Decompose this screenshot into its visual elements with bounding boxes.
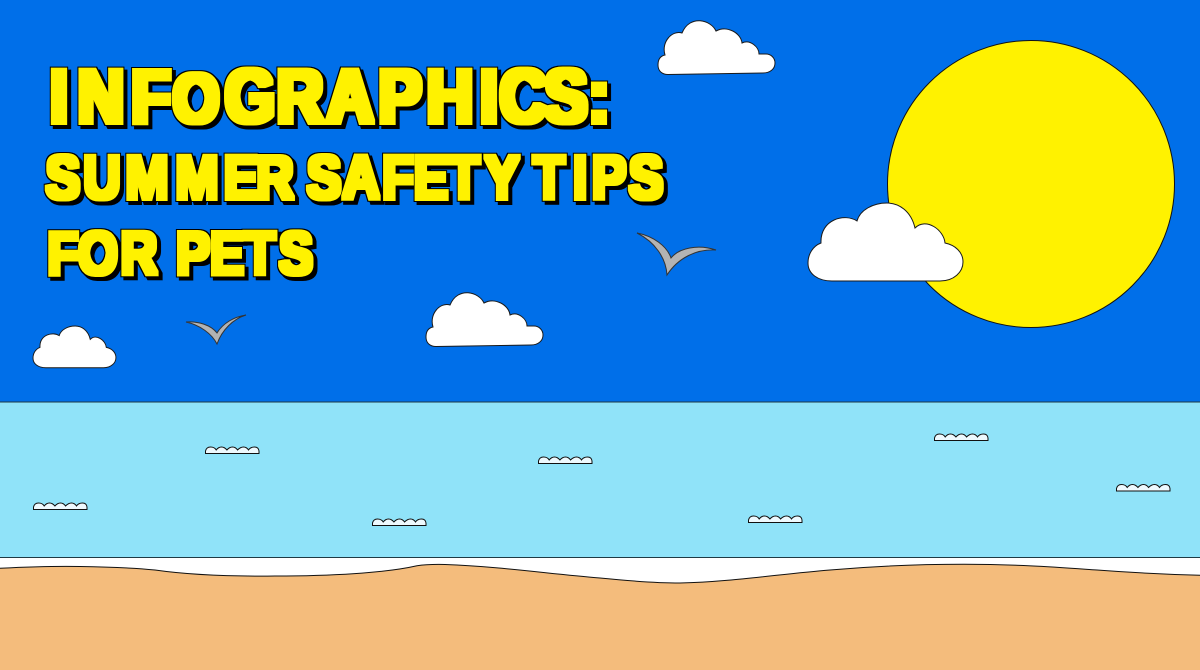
wave 7: [34, 503, 87, 510]
cloud: in front of sun: [808, 203, 963, 281]
wave 5: [748, 516, 802, 522]
sun: [888, 40, 1174, 328]
cloud: middle: [426, 293, 543, 346]
wave 3: [934, 434, 988, 440]
sand: [0, 564, 1200, 670]
sea wave markers: [34, 434, 1170, 526]
surf foam strip: [0, 558, 1200, 588]
sky background: [0, 0, 1200, 402]
wave 2: [538, 457, 592, 464]
title line 1: INFOGRAPHICS:: [50, 54, 610, 139]
title line 3: FOR PETS: [47, 220, 313, 287]
wave 6: [372, 519, 426, 526]
cloud: small left: [33, 326, 116, 368]
icon: large seagull: [637, 233, 716, 275]
icon: small seagull: [186, 315, 246, 344]
title: [46, 54, 663, 287]
wave 1: [206, 447, 259, 454]
sea: [0, 402, 1200, 558]
wave 4: [1116, 484, 1170, 491]
title line 2: SUMMER SAFETY TIPS: [46, 144, 663, 211]
cloud: top centre: [658, 21, 775, 74]
